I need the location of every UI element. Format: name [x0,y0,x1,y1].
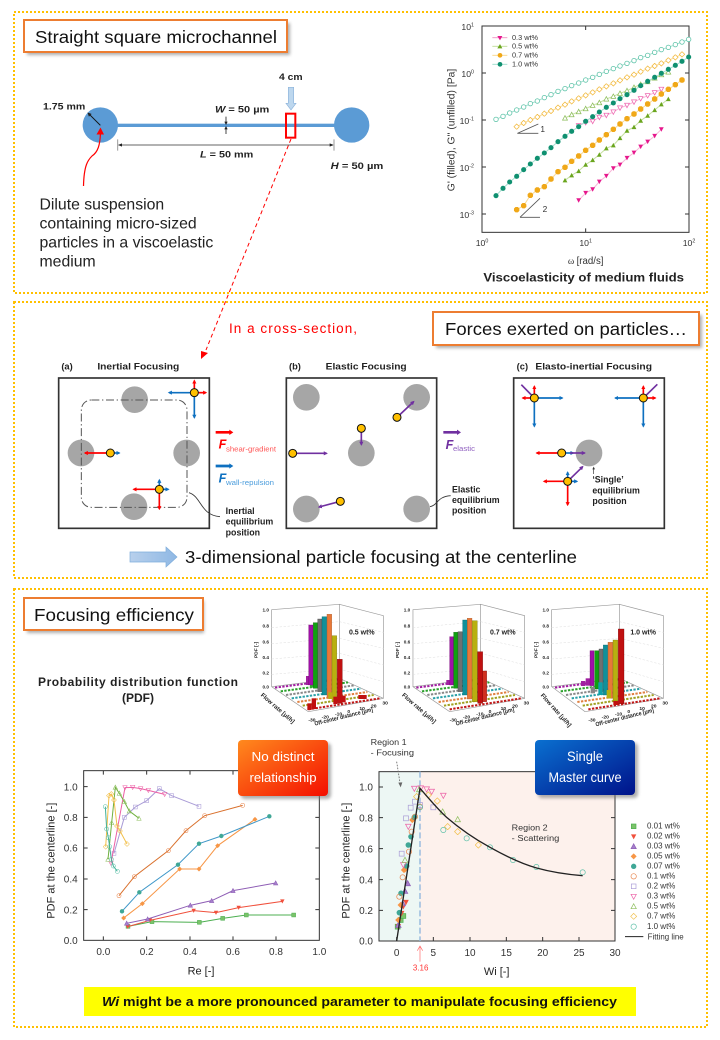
chart: viscoelasticity of medium fluids: 2 [692,239,695,245]
3D chart: 1.0 wt%: 10 [639,706,645,712]
chart: PDF vs Wi: 15 [501,948,512,959]
chart legend: 0.3 wt% [647,892,675,901]
3D chart: 1.0 wt%: 0 [627,709,630,715]
callout: single master curve [535,740,638,798]
conclusion banner: Wi might be a more pronounced parameter to manipulate focusing efficiency [102,994,618,1009]
channel schematic [43,72,383,171]
channel schematic: 1.75 mm [43,102,85,112]
chart legend: 0.5 wt% [647,902,675,911]
callout: no distinct relationship: relationship [250,770,316,785]
legend: shear-gradient and wall-repulsion forces [216,430,276,487]
3D chart: 0.7 wt%: 10 [501,706,506,712]
heading: forces exerted on particles [433,312,702,348]
panel a: inertial focusing: Inertial [226,506,255,516]
chart: viscoelasticity of medium fluids: 10 [461,22,471,32]
panel b: elastic focusing: Elastic Focusing [326,361,407,371]
text: probability distribution function: Probability distribution function [38,675,238,689]
chart: PDF vs Wi: 0.8 [359,813,373,824]
3D chart: 0.5 wt%: PDF [-] [254,641,260,658]
3D chart: 1.0 wt%: 1.0 [543,608,549,613]
3D chart: 0.7 wt%: 0.6 [404,640,411,645]
chart: viscoelasticity of medium fluids: 10 [683,238,692,248]
panel c: elasto-inertial focusing: equilibrium [592,485,640,495]
text: dilute suspension: containing micro-sized [40,216,197,232]
3D chart: 0.7 wt%: 1.0 [404,608,411,613]
3D chart: 1.0 wt%: 0.6 [543,640,549,645]
chart: viscoelasticity of medium fluids: 0 [485,239,488,245]
conclusion banner [84,987,636,1016]
3D chart: 0.5 wt%: 20 [371,703,377,709]
3D chart: 0.5 wt%: 0.2 [263,670,269,675]
chart legend: 0.2 wt% [647,882,675,891]
chart: viscoelasticity of medium fluids: 10 [579,238,589,248]
arrow head: inlet [96,128,104,134]
3D chart: 1.0 wt%: Flow rate [μl/h] [539,693,572,729]
chart: viscoelasticity of medium fluids: 1 [540,124,545,134]
chart: PDF vs Wi: Region 1 [371,738,407,747]
3D chart: 0.7 wt%: 0 [489,709,492,715]
heading: forces exerted on particles: Forces exerted on particles… [445,319,687,339]
chart legend: 0.07 wt% [647,862,680,871]
chart: PDF vs Re: 0.2 [140,947,154,958]
chart: PDF vs Wi: 20 [537,948,549,959]
panel c: elasto-inertial focusing: ‘Single’ [592,475,624,485]
channel schematic: L = 50 mm [200,149,253,159]
chart legend: 0.5 wt% [512,42,539,51]
chart: viscoelasticity of medium fluids: G' (filled), G'' (unfilled) [Pa] [446,69,457,191]
3D chart: 1.0 wt%: PDF [-] [534,641,540,658]
channel schematic: 4 cm [279,72,303,82]
3D chart: 1.0 wt%: -10 [615,712,622,718]
3D chart: 0.5 wt%: 0.4 [263,655,269,660]
chart: PDF vs Re: 0.8 [64,813,78,824]
3D chart: 1.0 wt%: 0.8 [543,624,549,629]
3D chart: 0.7 wt%: 0.7 wt% [490,629,516,636]
chart: PDF vs Re: 1.0 [312,947,327,958]
chart: PDF vs Wi: 0 [394,948,400,959]
chart: viscoelasticity of medium fluids: 10 [460,163,469,173]
chart legend: 1.0 wt% [647,922,675,931]
chart: viscoelasticity of medium fluids [446,22,695,285]
3D chart: 0.7 wt%: 20 [512,703,518,709]
3D chart: 0.7 wt%: -10 [476,712,484,718]
chart: viscoelasticity of medium fluids: -2 [469,164,474,170]
legend: elastic force: F [446,438,454,452]
legend: shear-gradient and wall-repulsion forces: shear-gradient [226,446,276,453]
panel a: inertial focusing: Inertial Focusing [97,361,179,371]
3D chart: 1.0 wt%: 0.4 [543,655,549,660]
chart legend: 0.7 wt% [647,912,675,921]
3D chart: 0.5 wt%: 0 [347,709,350,715]
heading: straight square microchannel [24,20,290,55]
legend: shear-gradient and wall-repulsion forces: wall-repulsion [225,480,274,487]
chart: PDF vs Re [46,771,327,977]
callout: single master curve: Master curve [548,769,622,785]
chart: PDF vs Wi: 30 [609,948,621,959]
3D chart: 1.0 wt%: -20 [602,715,609,721]
3D chart: 0.7 wt%: Off-center distance [μm] [455,707,515,728]
3D chart: 1.0 wt%: -30 [588,718,596,724]
text: probability distribution function: (PDF) [122,691,154,705]
text: dilute suspension: medium [40,254,96,270]
3D chart: 0.5 wt%: 30 [382,701,388,707]
3D chart: 0.5 wt%: 0.5 wt% [349,629,375,636]
3D chart: 0.7 wt%: 0.8 [404,624,411,629]
legend: elastic force: elastic [453,446,476,453]
chart: PDF vs Wi [340,738,684,978]
chart: PDF vs Re: 0.4 [183,947,197,958]
3D chart: 0.7 wt%: -30 [450,718,457,724]
3D chart: 0.5 wt%: -30 [308,718,316,724]
chart: PDF vs Wi: 5 [431,948,437,959]
chart: PDF vs Wi: Region 2 [512,824,548,833]
text: dilute suspension: Dilute suspension [40,196,164,214]
3D chart: 0.5 wt%: Off-center distance [μm] [314,707,374,728]
arrow: block arrow to conclusion [130,547,177,567]
chart: PDF vs Re: Re [-] [188,965,214,977]
chart: viscoelasticity of medium fluids: 10 [460,116,469,126]
3D chart: 1.0 wt%: 0.0 [543,684,549,689]
chart legend: Fitting line [648,932,684,941]
3D chart: 0.5 wt%: -10 [335,712,342,718]
panel a: inertial focusing: position [226,527,260,537]
3D chart: 0.7 wt%: 30 [524,701,529,707]
chart legend: 0.05 wt% [647,852,680,861]
panel a: inertial focusing: (a) [61,361,73,371]
3D chart: 0.7 wt%: PDF [-] [395,641,401,658]
chart: PDF vs Re: 0.6 [226,947,240,958]
chart: PDF vs Wi: PDF at the centerline [-] [340,803,352,919]
3D chart: 1.0 wt%: Off-center distance [μm] [595,708,655,728]
3D chart: 0.7 wt%: Flow rate [μl/h] [400,693,436,725]
chart: PDF vs Wi: 10 [464,948,476,959]
arrow: inlet red arrow [84,133,100,186]
chart: viscoelasticity of medium fluids: -1 [469,117,474,123]
panel b: elastic focusing: equilibrium [452,495,500,505]
3D chart: 0.5 wt% [254,604,388,728]
3D chart: 0.5 wt%: 0.6 [263,640,269,645]
chart: viscoelasticity of medium fluids: -3 [469,211,474,217]
3D chart: 0.5 wt%: Flow rate [μl/h] [259,693,295,725]
legend: shear-gradient and wall-repulsion forces: F [219,438,227,452]
panel c: elasto-inertial focusing: (c) [517,361,528,371]
channel schematic: W = 50 µm [215,104,269,114]
chart: PDF vs Wi: 1.0 [359,783,373,794]
panel c: elasto-inertial focusing: position [592,496,627,506]
chart legend [492,33,539,69]
panel: forces exerted on particles [14,302,707,578]
3D chart: 0.7 wt%: 0.2 [404,670,411,675]
callout: no distinct relationship [238,740,331,799]
3D chart: 1.0 wt% [534,604,668,729]
chart legend: 0.3 wt% [512,33,539,42]
chart: PDF vs Wi: - Focusing [371,748,414,757]
3D chart: 0.5 wt%: 1.0 [263,608,269,613]
chart: PDF vs Wi: 0.2 [359,906,373,917]
3D chart: 1.0 wt%: 0.2 [543,670,549,675]
chart: PDF vs Wi: 0.0 [359,937,373,948]
3D chart: 1.0 wt%: 20 [651,703,657,709]
3D chart: 1.0 wt%: 30 [662,701,668,707]
3D chart: 0.5 wt%: 0.8 [263,624,269,629]
panel b: elastic focusing [286,361,500,528]
chart: PDF vs Re: PDF at the centerline [-] [46,803,58,919]
chart: viscoelasticity of medium fluids: Viscoelasticity of medium fluids [483,272,684,285]
chart: PDF vs Re: 0.0 [64,936,78,947]
chart: PDF vs Wi: 25 [573,948,585,959]
3D chart: 0.7 wt%: -20 [463,715,470,721]
legend: shear-gradient and wall-repulsion forces: F [219,472,227,486]
chart: PDF vs Wi: Wi [-] [484,966,509,978]
chart legend: 0.02 wt% [647,832,680,841]
3D chart: 0.5 wt%: -20 [322,715,329,721]
legend: elastic force [443,430,476,453]
panel b: elastic focusing: Elastic [452,484,481,494]
3D chart: 0.7 wt%: 0.4 [404,655,411,660]
chart: viscoelasticity of medium fluids: ω [rad/s] [568,256,603,267]
chart: viscoelasticity of medium fluids: 2 [543,204,548,214]
chart legend: 0.03 wt% [647,842,680,851]
text: in a cross-section: In a cross-section, [229,321,357,336]
chart: viscoelasticity of medium fluids: 0 [471,70,474,76]
panel: straight square microchannel [14,12,707,293]
text: dilute suspension: particles in a viscoelastic [40,234,213,252]
chart: PDF vs Re: 0.6 [64,844,78,855]
chart legend [625,822,684,941]
panel c: elasto-inertial focusing [514,361,664,528]
heading: focusing efficiency: Focusing efficiency [34,605,194,625]
3D chart: 0.5 wt%: 10 [359,706,365,712]
chart: PDF vs Wi: 0.4 [359,875,373,886]
chart: viscoelasticity of medium fluids: 10 [461,69,471,79]
panel b: elastic focusing: (b) [289,361,301,371]
heading: focusing efficiency [24,598,204,633]
text: 3-dimensional particle focusing: 3-dimensional particle focusing at the centerline [185,547,577,567]
heading: straight square microchannel: Straight square microchannel [35,27,277,47]
panel a: inertial focusing: equilibrium [226,517,273,527]
panel b: elastic focusing: position [452,506,486,516]
3D chart: 1.0 wt%: 1.0 wt% [630,629,657,636]
chart: PDF vs Wi: 3.16 [413,963,429,972]
chart: PDF vs Re: 0.4 [64,875,78,886]
chart: viscoelasticity of medium fluids: 10 [460,210,469,220]
panel a: inertial focusing [59,361,273,537]
chart legend: 0.1 wt% [647,872,675,881]
chart: PDF vs Wi: - Scattering [512,834,559,843]
chart: viscoelasticity of medium fluids: 1 [589,239,592,245]
chart: viscoelasticity of medium fluids: 10 [476,238,485,248]
chart legend: 0.7 wt% [512,51,539,60]
3D chart: 0.5 wt%: 0.0 [263,684,269,689]
chart legend: 0.01 wt% [647,822,680,831]
3D chart: 0.7 wt% [395,604,529,728]
callout: single master curve: Single [567,748,603,764]
arrow: dashed red link to cross-section [201,139,291,359]
chart: PDF vs Wi: 0.6 [359,844,373,855]
3D chart: 0.7 wt%: 0.0 [404,684,411,689]
channel schematic: H = 50 µm [331,161,383,171]
chart: viscoelasticity of medium fluids: 1 [471,23,474,29]
panel c: elasto-inertial focusing: Elasto-inertial Focusing [535,361,652,371]
chart: PDF vs Re: 1.0 [64,782,78,793]
chart: PDF vs Re: 0.2 [64,905,78,916]
panel: focusing efficiency [14,589,707,1027]
chart: PDF vs Re: 0.8 [269,947,283,958]
callout: no distinct relationship: No distinct [252,749,315,764]
chart legend: 1.0 wt% [512,60,539,69]
chart: PDF vs Re: 0.0 [96,947,111,958]
